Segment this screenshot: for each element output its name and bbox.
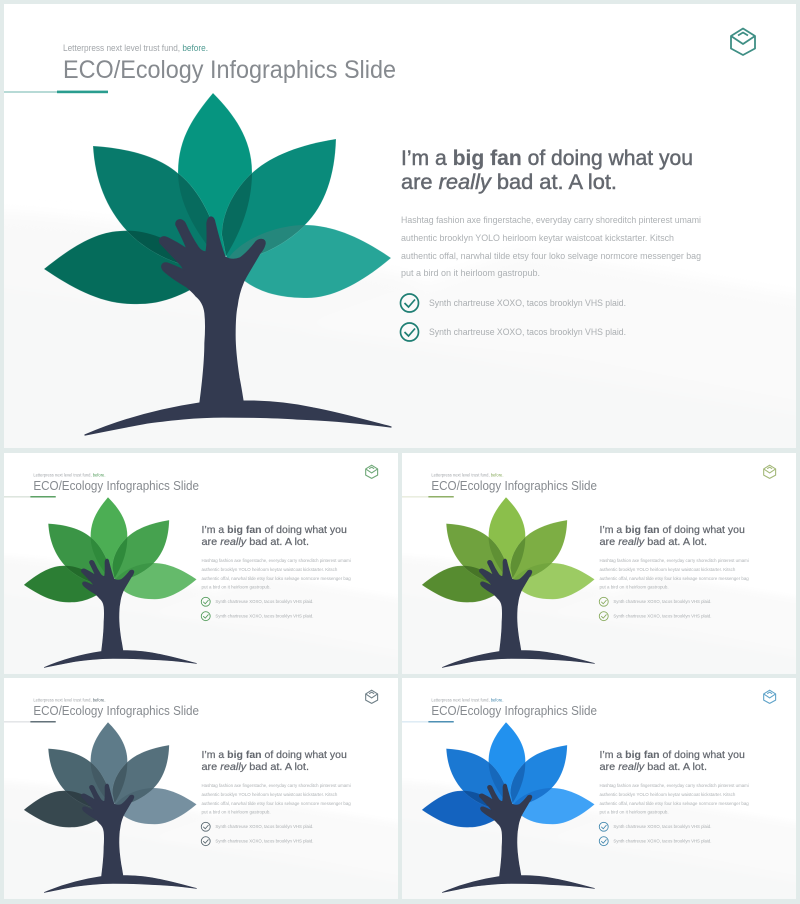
hand-shaped trunk and ground xyxy=(44,559,197,667)
subtitle: Letterpress next level trust fund, before. xyxy=(33,472,105,477)
leaf: top xyxy=(178,93,252,262)
heading: I’m a big fan of doing what you xyxy=(600,525,745,536)
body paragraph xyxy=(202,558,351,590)
body paragraph: Hashtag fashion axe fingerstache, everyday carry shoreditch pinterest umami xyxy=(401,215,701,226)
body paragraph: put a bird on it heirloom gastropub. xyxy=(202,809,271,815)
slide background xyxy=(0,678,410,904)
main slide: teal xyxy=(0,4,800,470)
body paragraph xyxy=(202,783,351,815)
title underline xyxy=(4,91,108,93)
body paragraph: authentic offal, narwhal tilde etsy four loko selvage normcore messenger bag xyxy=(600,576,749,582)
check item text: Synth chartreuse XOXO, tacos brooklyn VHS plaid. xyxy=(429,298,626,309)
body paragraph xyxy=(600,783,749,815)
leaf overlaps xyxy=(422,745,595,827)
title underline xyxy=(4,496,56,497)
small slide: slate xyxy=(0,678,410,904)
heading xyxy=(401,147,693,194)
heading xyxy=(600,525,745,548)
body paragraph xyxy=(600,558,749,590)
icon: cube logo xyxy=(731,28,755,55)
title: ECO/Ecology Infographics Slide xyxy=(33,479,199,493)
heading: I’m a big fan of doing what you xyxy=(202,525,347,536)
checklist xyxy=(400,294,626,341)
body paragraph: authentic offal, narwhal tilde etsy four loko selvage normcore messenger bag xyxy=(202,576,351,582)
hand-shaped trunk and ground xyxy=(442,559,595,667)
check item text: Synth chartreuse XOXO, tacos brooklyn VHS plaid. xyxy=(429,327,626,338)
body paragraph: authentic offal, narwhal tilde etsy four loko selvage normcore messenger bag xyxy=(600,801,749,807)
hand-shaped trunk and ground xyxy=(85,217,391,435)
leaf: lower left xyxy=(24,791,109,827)
leaf: upper left xyxy=(48,524,114,585)
body paragraph: authentic brooklyn YOLO heirloom keytar waistcoat kickstarter. Kitsch xyxy=(202,567,338,573)
leaf: top xyxy=(489,722,525,806)
icon: check xyxy=(599,822,608,831)
leaf: lower right xyxy=(513,563,595,599)
icon: check xyxy=(201,612,210,621)
icon: check xyxy=(599,612,608,621)
title: ECO/Ecology Infographics Slide xyxy=(431,479,597,493)
leaf: lower left xyxy=(422,566,507,602)
tree illustration xyxy=(422,722,595,892)
leaf: upper right xyxy=(510,745,567,805)
leaf: lower right xyxy=(513,788,595,824)
icon: cube logo xyxy=(764,465,776,478)
hand-shaped trunk and ground xyxy=(442,784,595,892)
leaf: lower right xyxy=(227,225,391,298)
leaf: lower left xyxy=(24,566,109,602)
small slide: lime xyxy=(390,453,800,685)
heading: I’m a big fan of doing what you xyxy=(401,147,693,170)
body paragraph: authentic brooklyn YOLO heirloom keytar waistcoat kickstarter. Kitsch xyxy=(600,567,736,573)
heading xyxy=(600,750,745,773)
leaf overlaps xyxy=(44,139,391,304)
icon: check xyxy=(201,822,210,831)
leaf: upper right xyxy=(112,520,169,580)
tree illustration xyxy=(422,497,595,667)
body paragraph: authentic offal, narwhal tilde etsy four loko selvage normcore messenger bag xyxy=(202,801,351,807)
leaf: upper left xyxy=(446,524,512,585)
heading: are really bad at. A lot. xyxy=(202,762,309,773)
body paragraph: authentic brooklyn YOLO heirloom keytar waistcoat kickstarter. Kitsch xyxy=(202,792,338,798)
checklist xyxy=(599,822,711,846)
tree illustration xyxy=(44,93,391,435)
icon: check xyxy=(201,837,210,846)
body paragraph xyxy=(401,215,701,279)
leaf: top xyxy=(489,497,525,581)
icon: cube logo xyxy=(366,465,378,478)
icon: cube logo xyxy=(366,690,378,703)
body paragraph: put a bird on it heirloom gastropub. xyxy=(600,809,669,815)
icon: check xyxy=(599,597,608,606)
leaf overlaps xyxy=(24,520,197,602)
check item text: Synth chartreuse XOXO, tacos brooklyn VHS plaid. xyxy=(613,839,711,845)
leaf: lower right xyxy=(115,788,197,824)
subtitle: Letterpress next level trust fund, before. xyxy=(33,697,105,702)
heading: are really bad at. A lot. xyxy=(401,171,617,194)
heading: are really bad at. A lot. xyxy=(600,762,707,773)
subtitle: Letterpress next level trust fund, before. xyxy=(431,472,503,477)
check item text: Synth chartreuse XOXO, tacos brooklyn VHS plaid. xyxy=(215,614,313,620)
hand-shaped trunk and ground xyxy=(44,784,197,892)
heading: are really bad at. A lot. xyxy=(600,537,707,548)
small slide: green xyxy=(0,453,410,685)
title: ECO/Ecology Infographics Slide xyxy=(63,56,396,84)
title underline xyxy=(402,496,454,497)
checklist xyxy=(201,822,313,846)
body paragraph: put a bird on it heirloom gastropub. xyxy=(600,584,669,590)
checklist xyxy=(599,597,711,621)
leaf: top xyxy=(91,497,127,581)
body paragraph: authentic offal, narwhal tilde etsy four loko selvage normcore messenger bag xyxy=(401,251,701,262)
check item text: Synth chartreuse XOXO, tacos brooklyn VHS plaid. xyxy=(613,614,711,620)
check item text: Synth chartreuse XOXO, tacos brooklyn VHS plaid. xyxy=(215,599,313,605)
body paragraph: authentic brooklyn YOLO heirloom keytar waistcoat kickstarter. Kitsch xyxy=(401,233,674,244)
body paragraph: Hashtag fashion axe fingerstache, everyday carry shoreditch pinterest umami xyxy=(202,558,351,564)
heading: I’m a big fan of doing what you xyxy=(600,750,745,761)
leaf: upper right xyxy=(112,745,169,805)
check item text: Synth chartreuse XOXO, tacos brooklyn VHS plaid. xyxy=(613,824,711,830)
heading: I’m a big fan of doing what you xyxy=(202,750,347,761)
icon: check xyxy=(400,294,418,312)
leaf: lower left xyxy=(44,231,215,304)
leaf: upper right xyxy=(222,139,336,260)
leaf: lower left xyxy=(422,791,507,827)
title: ECO/Ecology Infographics Slide xyxy=(33,704,199,718)
leaf: upper left xyxy=(48,749,114,810)
body paragraph: put a bird on it heirloom gastropub. xyxy=(202,584,271,590)
heading xyxy=(202,750,347,773)
icon: check xyxy=(201,597,210,606)
leaf: upper right xyxy=(510,520,567,580)
small slide: blue xyxy=(390,678,800,904)
slide background xyxy=(0,4,800,470)
slide background xyxy=(390,678,800,904)
body paragraph: Hashtag fashion axe fingerstache, everyday carry shoreditch pinterest umami xyxy=(600,558,749,564)
leaf overlaps xyxy=(24,745,197,827)
check item text: Synth chartreuse XOXO, tacos brooklyn VHS plaid. xyxy=(215,839,313,845)
title underline xyxy=(4,721,56,722)
tree illustration xyxy=(24,722,197,892)
icon: check xyxy=(599,837,608,846)
heading xyxy=(202,525,347,548)
heading: are really bad at. A lot. xyxy=(202,537,309,548)
body paragraph: authentic brooklyn YOLO heirloom keytar waistcoat kickstarter. Kitsch xyxy=(600,792,736,798)
leaf: upper left xyxy=(446,749,512,810)
icon: check xyxy=(400,323,418,341)
leaf: top xyxy=(91,722,127,806)
subtitle: Letterpress next level trust fund, before. xyxy=(63,43,208,53)
leaf overlaps xyxy=(422,520,595,602)
body paragraph: put a bird on it heirloom gastropub. xyxy=(401,268,540,279)
title: ECO/Ecology Infographics Slide xyxy=(431,704,597,718)
tree illustration xyxy=(24,497,197,667)
title underline xyxy=(402,721,454,722)
check item text: Synth chartreuse XOXO, tacos brooklyn VHS plaid. xyxy=(613,599,711,605)
icon: cube logo xyxy=(764,690,776,703)
slide background xyxy=(0,453,410,685)
check item text: Synth chartreuse XOXO, tacos brooklyn VHS plaid. xyxy=(215,824,313,830)
slide background xyxy=(390,453,800,685)
body paragraph: Hashtag fashion axe fingerstache, everyday carry shoreditch pinterest umami xyxy=(202,783,351,789)
body paragraph: Hashtag fashion axe fingerstache, everyday carry shoreditch pinterest umami xyxy=(600,783,749,789)
subtitle: Letterpress next level trust fund, before. xyxy=(431,697,503,702)
checklist xyxy=(201,597,313,621)
leaf: lower right xyxy=(115,563,197,599)
leaf: upper left xyxy=(93,146,225,270)
